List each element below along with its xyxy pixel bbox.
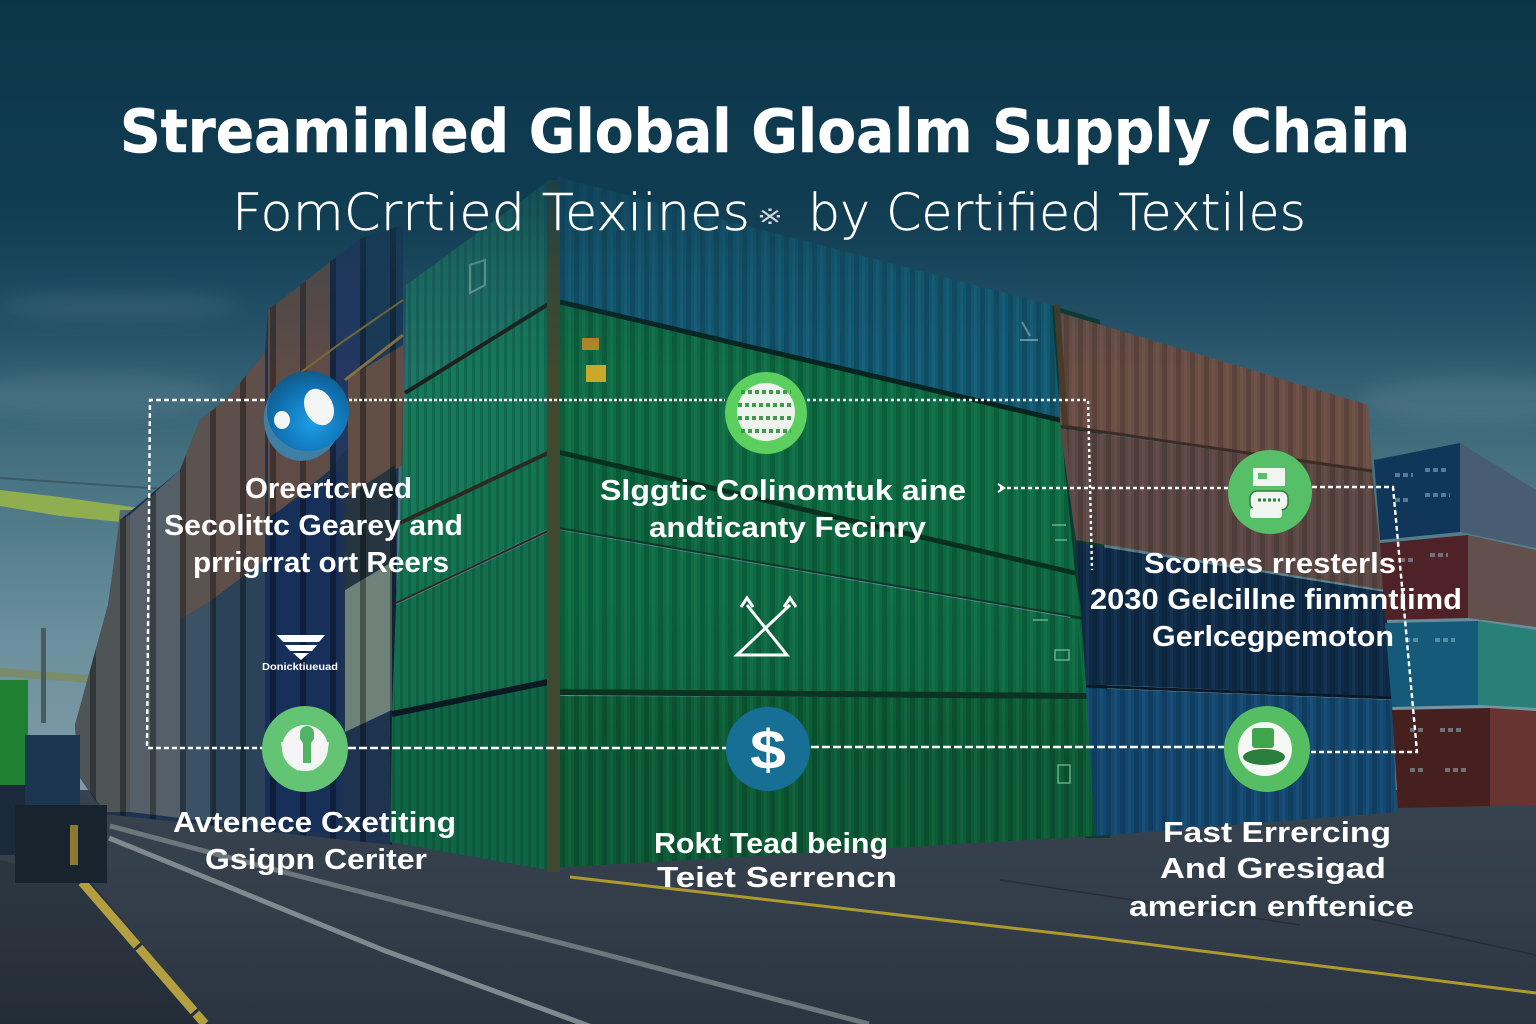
- background: central container block, left face: [390, 180, 550, 870]
- label text: Teiet Serrencn: [657, 862, 897, 894]
- label text: prrigrrat ort Reers: [193, 547, 449, 579]
- label text: americn enftenice: [1129, 891, 1414, 923]
- label text: Gerlcegpemoton: [1152, 621, 1394, 653]
- logo: wing emblem: [262, 635, 338, 673]
- icon: crossed arrows over triangle: [737, 598, 796, 655]
- connector: dashed flow path: [147, 400, 1417, 752]
- label text: 2030 Gelcillne finmntiimd: [1090, 584, 1462, 616]
- label text: And Gresigad: [1160, 853, 1386, 885]
- background: cloud streaks: [0, 291, 1536, 424]
- label text: Oreertcrved: [245, 473, 412, 505]
- background: truck: [0, 680, 107, 883]
- label text: Slggtic Colinomtuk aine: [600, 475, 966, 507]
- label text: Rokt Tead being: [654, 828, 888, 860]
- step: top centre: [600, 372, 966, 544]
- step: bottom left: [173, 706, 456, 876]
- background: backing behind the block seam: [1050, 305, 1110, 838]
- background: right brown and blue containers: [1054, 305, 1397, 836]
- background: crane and pylon: [0, 478, 180, 723]
- label text: Gsigpn Ceriter: [205, 844, 427, 876]
- label text: [654, 828, 897, 894]
- label text: [600, 475, 966, 544]
- subtitle: [232, 184, 1306, 243]
- label text: Scomes rresterls: [1144, 548, 1396, 580]
- logo: wing emblem: Donicktiueuad: [262, 662, 338, 673]
- label text: [1090, 548, 1462, 653]
- label text: [1129, 817, 1414, 923]
- arrow tip on connector: [998, 484, 1004, 492]
- label text: Secolittc Gearey and: [164, 510, 463, 542]
- label text: Fast Errercing: [1163, 817, 1391, 849]
- icon: green circle with hands and plant: [262, 706, 348, 792]
- step: bottom centre: [654, 707, 897, 894]
- step: top left: [164, 367, 463, 579]
- icon: blue circle with dollar sign: [726, 707, 810, 791]
- background: central container block, right face: [470, 177, 1095, 872]
- background: ground and road: [0, 790, 1536, 1024]
- step: middle right: [1090, 450, 1462, 653]
- subtitle: FomCrrtied Texiines: [232, 184, 750, 243]
- background: far right container stack: [1374, 443, 1536, 808]
- label text: andticanty Fecinry: [649, 512, 926, 544]
- subtitle: ※: [757, 204, 783, 229]
- label text: [173, 807, 456, 876]
- subtitle: by Certified Textiles: [808, 184, 1306, 243]
- icon: blue circle with dollar sign: $: [750, 718, 786, 781]
- title: Streaminled Global Gloalm Supply Chain: [120, 97, 1410, 167]
- label text: [164, 473, 463, 579]
- icon: green circle with white disc and emblem: [1224, 706, 1310, 792]
- step: bottom right: [1129, 706, 1414, 923]
- icon: blue globe with droplets: [257, 367, 349, 467]
- icon: green circle with document and device: [1228, 450, 1312, 534]
- icon: green circle with textile badge: [725, 372, 807, 454]
- background: left far container stack: [75, 225, 403, 845]
- label text: Avtenece Cxetiting: [173, 807, 456, 839]
